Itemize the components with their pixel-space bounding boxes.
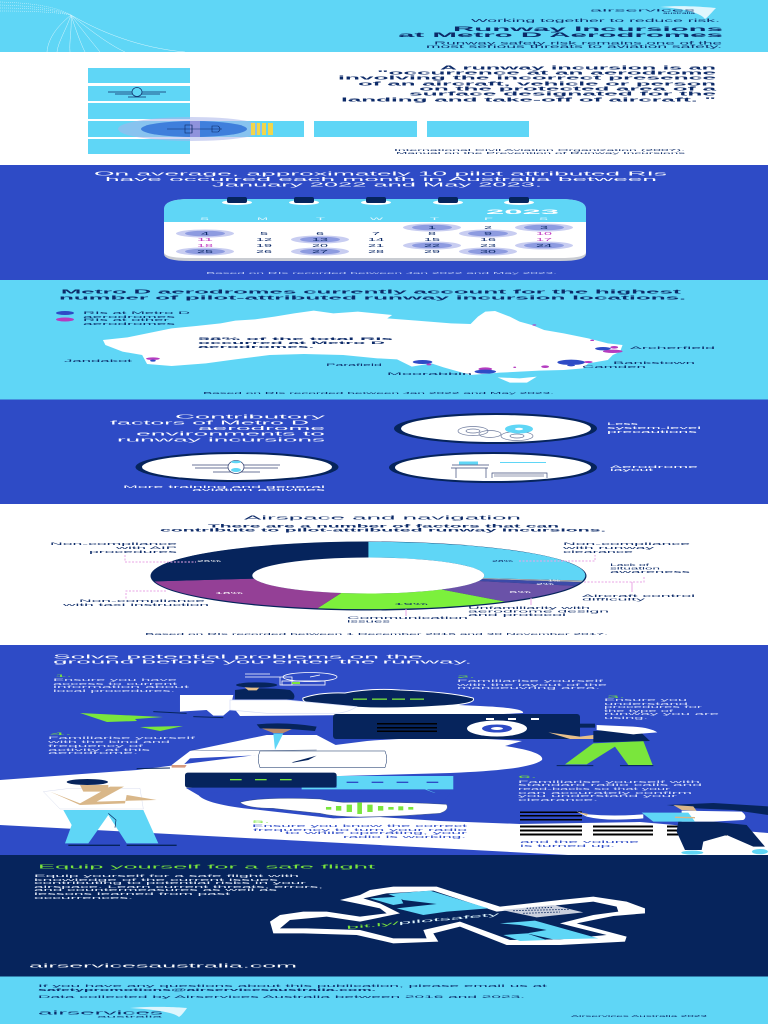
step 4: with the kind and	[48, 740, 170, 744]
calendar dates: 20	[312, 243, 330, 248]
calendar dates: 12	[256, 237, 274, 242]
step 3: runway you are	[604, 712, 719, 716]
map note: Based on RIs recorded between Jan 2022 and May 2023.	[203, 391, 555, 395]
equip heading: Equip yourself for a safe flight	[38, 864, 378, 870]
person: standing with table	[137, 723, 387, 769]
calendar dates: 9	[484, 231, 494, 236]
calendar dates: 25	[197, 249, 215, 254]
label	[607, 422, 702, 434]
label: precautions	[607, 430, 698, 434]
donut category labels: aerodrome design	[468, 609, 609, 613]
title: Runway Incursions	[453, 26, 725, 33]
donut category labels: with taxi instruction	[63, 603, 209, 607]
logo: airservices australia: airservices	[590, 8, 695, 12]
quote: involving the incorrect presence	[338, 76, 717, 82]
calendar dates: 4	[201, 231, 211, 236]
calendar dates: 2	[484, 225, 494, 230]
map callout: 58% of the total RIs	[198, 337, 393, 341]
person: thinking	[43, 779, 177, 845]
map callout: aerodromes.	[198, 345, 314, 349]
calendar dates: 16	[480, 237, 498, 242]
step 3: understand	[604, 702, 688, 706]
calendar dates: 13	[312, 237, 330, 242]
quote: A runway incursion is an	[440, 66, 716, 72]
highlighted days	[176, 224, 573, 256]
logo: airservices australia	[590, 6, 716, 19]
weekday labels: W	[370, 217, 383, 221]
factors heading: Contributory	[175, 415, 327, 421]
panel: map	[0, 280, 768, 400]
map place labels: Moorabbin	[387, 372, 472, 376]
factors heading: environments to	[136, 432, 326, 438]
white ground swoosh	[0, 738, 768, 855]
label: aviation activities	[192, 488, 326, 492]
label: Aerodrome	[610, 465, 698, 469]
equip body text: contributing to potential risks in your	[34, 881, 310, 885]
donut category labels: clearance	[563, 550, 633, 554]
map heading: number of pilot-attributed runway incursion locations.	[59, 296, 689, 302]
icon: terminal	[451, 462, 547, 478]
calendar year: 2023	[486, 210, 563, 216]
weekday labels: T	[316, 217, 325, 221]
volume note: and the volume	[520, 840, 639, 844]
map place labels: Parafield	[326, 363, 382, 367]
donut percentages: 1%	[548, 578, 561, 582]
donut note: Based on RIs recorded between 1 December 2016 and 30 November 2017.	[145, 632, 609, 636]
donut category labels: issues	[347, 619, 391, 623]
donut percentages: 26%	[197, 559, 222, 563]
quote	[338, 66, 718, 104]
calendar heading: January 2022 and May 2023.	[212, 183, 544, 189]
factor: aerodrome layout	[389, 452, 698, 483]
donut category labels: Non-compliance	[50, 542, 177, 546]
map place labels: Bankstown	[613, 361, 695, 365]
weekday labels	[200, 217, 548, 221]
step 6: 6.	[518, 775, 537, 779]
step 3: the type of	[604, 709, 673, 713]
calendar dates: 21	[368, 243, 386, 248]
plane sticker with QR code	[270, 887, 645, 945]
step 5: 5.	[252, 820, 270, 824]
runway grid illustration	[88, 68, 529, 154]
step 5: radio is working.	[343, 835, 466, 839]
step 2	[457, 675, 607, 690]
calendar dates: 10	[536, 231, 554, 236]
step 2: manoeuvring area.	[457, 686, 600, 690]
citation: Manual on the Prevention of Runway Incursions	[396, 151, 687, 155]
donut category labels: procedures	[89, 550, 178, 554]
label	[123, 485, 326, 492]
quote: on the protected area of a	[419, 87, 717, 93]
donut category labels: and protocol	[468, 613, 567, 617]
map place labels: Camden	[582, 365, 646, 369]
quote: "occurrence at an aerodrome	[377, 71, 717, 77]
calendar dates: 24	[536, 243, 554, 248]
map legend: RIs at Metro D	[83, 311, 193, 315]
panel: footer	[0, 976, 768, 1024]
step 4: 4.	[50, 732, 72, 736]
label: More training and general	[123, 485, 326, 489]
heading: Solve potential problems on the	[53, 654, 424, 660]
equip body text: lessons learned from past	[34, 892, 230, 896]
donut category labels: with runway	[563, 546, 655, 550]
calendar dates: 6	[316, 231, 326, 236]
equip body text	[34, 874, 323, 900]
step 1: access to current	[53, 682, 177, 686]
donut category labels: Aircraft control	[582, 594, 696, 598]
weekday labels: M	[257, 217, 269, 221]
panel: calendar statistic	[0, 165, 768, 280]
calendar	[164, 197, 586, 261]
weekday labels: S	[539, 217, 548, 221]
donut category labels: with AIP	[116, 546, 180, 550]
equip body text: and countermeasures as well as	[34, 888, 278, 892]
step 3: procedures for	[604, 705, 706, 709]
step 6: standard radio calls and	[518, 783, 702, 787]
step 6: read-backs so that your	[518, 787, 673, 791]
donut heading: There are a number of factors that can	[208, 523, 561, 528]
donut category labels: Non-compliance	[563, 542, 690, 546]
donut percentages: 6%	[509, 590, 533, 594]
step 3: Ensure you	[604, 698, 687, 702]
citation: International Civil Aviation Organization (2007).	[394, 148, 686, 152]
donut category labels: Communication	[347, 616, 468, 620]
icon: aircraft and clock	[245, 672, 337, 685]
step 1: Ensure you have	[53, 678, 177, 682]
calendar dates: 15	[424, 237, 442, 242]
step 4: Familiarise yourself	[48, 736, 195, 740]
map legend	[56, 311, 193, 326]
flight path line art	[0, 2, 185, 52]
step 3: using.	[604, 716, 648, 720]
map of Australia	[103, 311, 623, 383]
icon: paper planes	[80, 713, 183, 731]
map legend: aerodromes	[83, 322, 177, 326]
calendar dates: 27	[312, 249, 330, 254]
heading	[53, 654, 472, 666]
weekday labels: F	[484, 217, 493, 221]
factors heading: aerodrome	[198, 426, 326, 432]
map callout	[198, 337, 393, 349]
website: airservicesaustralia.com	[29, 964, 297, 970]
calendar dates: 18	[197, 243, 215, 248]
equip body text: knowledge of the current issues	[34, 878, 279, 882]
calendar dates: 30	[480, 249, 498, 254]
donut heading: contribute to pilot-attributed runway incursions.	[160, 527, 606, 532]
donut category labels: Lack of	[610, 563, 649, 567]
header subtitle: most serious threats to aviation safety.	[426, 44, 722, 49]
donut category labels	[50, 542, 696, 623]
donut category labels: situation	[610, 566, 660, 570]
illustration: control panel	[333, 714, 580, 739]
quote: of an aircraft, vehicle or person	[358, 82, 716, 88]
step 6: clearance.	[518, 798, 598, 802]
donut category labels: Unfamiliarity with	[468, 606, 590, 610]
volume note	[520, 840, 639, 848]
donut category labels: difficulty	[582, 597, 646, 601]
calendar rings	[222, 197, 534, 205]
calendar dates: 19	[256, 243, 274, 248]
illustration: speech cloud	[303, 689, 474, 708]
donut percentages: 18%	[215, 591, 244, 595]
person: with clipboard	[577, 803, 768, 855]
map markers	[146, 324, 623, 374]
person: pilot at panel	[548, 724, 657, 766]
icon: plane	[192, 460, 280, 474]
contact text	[38, 984, 551, 999]
factors heading: runway incursions	[117, 438, 327, 444]
donut category labels: Non-compliance	[79, 599, 205, 603]
panel: header	[0, 0, 768, 52]
step 3	[604, 695, 719, 720]
calendar dates: 17	[536, 237, 554, 242]
map place labels	[64, 346, 715, 376]
label: layout	[610, 468, 653, 472]
contact text: If you have any questions about this publication, please email us at	[38, 984, 551, 988]
donut percentages: 19%	[394, 602, 430, 606]
person: seated with paper	[153, 682, 357, 718]
donut leader lines	[125, 555, 644, 616]
calendar dates: 11	[197, 237, 215, 242]
contact text: safetypromotions@airservicesaustralia.com.	[38, 988, 376, 992]
calendar heading	[94, 172, 668, 189]
footer logo	[38, 1007, 187, 1018]
donut category labels: awareness	[610, 570, 691, 574]
factors heading: factors of Metro D	[110, 421, 310, 427]
step 5	[252, 820, 471, 839]
equip body text: Equip yourself for a safe flight with	[34, 874, 299, 878]
panel: definition	[0, 52, 768, 165]
plane sticker with QR code: bit.ly/ pilotsafety	[346, 911, 504, 930]
panel: airspace and navigation	[0, 504, 768, 645]
donut percentages: 28%	[492, 559, 514, 563]
panel: solve problems on the ground	[0, 645, 768, 855]
label: system-level	[607, 426, 702, 430]
step 4: frequency of	[48, 744, 143, 748]
calendar heading: On average, approximately 10 pilot attributed RIs	[94, 172, 668, 178]
contact text: Data collected by Airservices Australia between 2016 and 2023.	[38, 995, 525, 999]
step 1	[53, 674, 189, 693]
calendar dates: 29	[424, 249, 442, 254]
map heading: Metro D aerodromes currently account for the highest	[61, 290, 682, 296]
factor: less system-level precautions	[394, 413, 702, 444]
heading: ground before you enter the runway.	[53, 660, 472, 666]
label	[610, 465, 698, 472]
donut chart	[150, 542, 586, 610]
step 2: with the layout of the	[457, 683, 607, 687]
calendar dates	[197, 225, 554, 254]
factor: training and general aviation	[123, 452, 338, 492]
white seat blob	[233, 703, 523, 716]
logo: airservices australia: australia	[663, 12, 697, 15]
panel: contributory factors	[0, 400, 768, 504]
calendar dates: 26	[256, 249, 274, 254]
citation	[394, 148, 687, 155]
header subtitle	[426, 40, 724, 49]
equip body text: airspace. Learn current threats, errors,	[34, 885, 323, 889]
step 6: can accurately confirm	[518, 791, 692, 795]
step 5: to while operating, your	[285, 831, 471, 835]
donut heading: Airspace and navigation	[244, 516, 522, 522]
quote: landing and take-off of aircraft. "	[341, 98, 718, 104]
step 4	[48, 732, 195, 755]
step 5: frequency to turn your radio	[253, 828, 467, 832]
label: Less	[607, 422, 639, 426]
calendar dates: 14	[368, 237, 386, 242]
step 3: 3.	[607, 695, 625, 699]
step 2: Familiarise yourself	[457, 679, 603, 683]
calendar heading: have occurred each month in Australia between	[105, 177, 657, 183]
calendar dates: 8	[428, 231, 438, 236]
map heading	[59, 290, 689, 302]
footer logo: australia	[97, 1014, 164, 1018]
calendar dates: 28	[368, 249, 386, 254]
calendar dates: 5	[260, 231, 270, 236]
equip body text: occurrences.	[34, 896, 133, 900]
weekday labels: S	[200, 217, 209, 221]
donut heading	[160, 516, 606, 532]
illustration: radio bar and speech bubble	[185, 773, 453, 818]
step 6: you understand your	[518, 794, 681, 798]
calendar dates: 3	[540, 225, 550, 230]
header kicker: Working together to reduce risk.	[471, 18, 720, 23]
illustration: radio cloud with sound bars	[240, 798, 447, 817]
donut percentages: 2%	[536, 582, 555, 586]
calendar note: Based on RIs recorded between Jan 2022 and May 2023.	[206, 271, 558, 275]
step 6	[518, 775, 702, 802]
weekday labels: T	[430, 217, 439, 221]
title: at Metro D Aerodromes	[398, 32, 725, 39]
step 4: activity at this	[48, 748, 151, 752]
map legend: aerodromes	[83, 315, 177, 319]
runway marking lines	[520, 812, 727, 836]
step 1: local procedures.	[53, 689, 175, 693]
map legend: RIs at other	[83, 318, 173, 322]
map callout: occurred at Metro D	[198, 341, 386, 345]
title	[398, 26, 725, 39]
calendar dates: 23	[480, 243, 498, 248]
step 1: 1.	[55, 674, 72, 678]
volume note: is turned up.	[520, 844, 615, 848]
calendar dates: 22	[424, 243, 442, 248]
map place labels: Archerfield	[630, 346, 715, 350]
step 5: Ensure you know the correct	[252, 824, 467, 828]
calendar dates: 7	[372, 231, 382, 236]
footer logo: airservices	[38, 1010, 165, 1016]
icon: gears	[458, 424, 533, 440]
panel: equip yourself	[0, 855, 768, 976]
factors heading	[110, 415, 327, 444]
step 4: aerodrome.	[48, 751, 138, 755]
header subtitle: Runway safety risk remains one of the	[434, 40, 724, 46]
copyright: Airservices Australia 2023	[571, 1014, 708, 1018]
donut percentages	[197, 559, 561, 606]
step 2: 2.	[457, 675, 475, 679]
quote: surface designated for the	[409, 92, 717, 98]
map place labels: Jandakot	[64, 359, 136, 363]
step 1: information about	[53, 685, 189, 689]
step 6: Familiarise yourself with	[518, 780, 700, 784]
calendar dates: 1	[428, 225, 438, 230]
